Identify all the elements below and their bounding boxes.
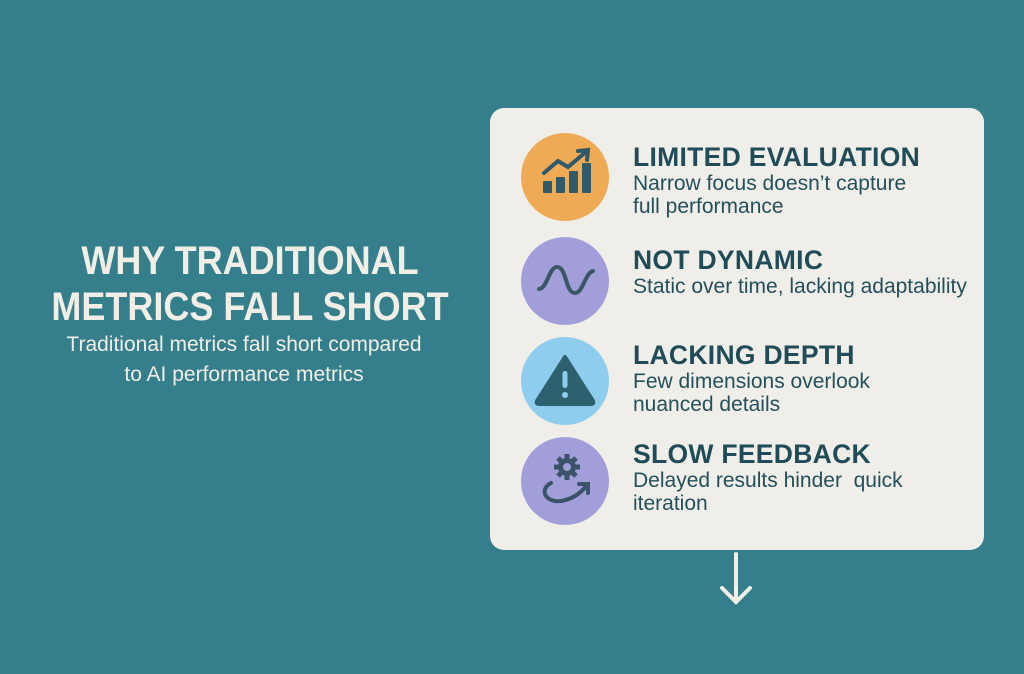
icon: wave [521,237,609,325]
subtitle: Traditional metrics fall short compared [66,333,422,356]
text: not dynamic: NOT DYNAMIC [633,245,823,275]
text: slow feedback: SLOW FEEDBACK [633,439,871,469]
icon: warning [521,337,609,425]
text: not dynamic [633,245,967,298]
text: slow feedback [633,439,903,515]
icon: gear cycle [521,437,609,525]
title: METRICS FALL SHORT [51,285,449,329]
panel: reasons card [490,108,984,550]
text: limited evaluation [633,142,920,218]
text: not dynamic: Static over time, lacking adaptability [633,275,967,298]
subtitle: to AI performance metrics [124,363,364,386]
arrow: down [720,552,752,605]
text: slow feedback: Delayed results hinder quick [633,469,903,492]
text: lacking depth: LACKING DEPTH [633,340,855,370]
icon: growth chart [521,133,609,221]
title [51,239,449,329]
text: lacking depth: Few dimensions overlook [633,370,870,393]
text: lacking depth [633,340,870,416]
subtitle [66,333,422,386]
text: lacking depth: nuanced details [633,393,780,416]
text: limited evaluation: Narrow focus doesn’t capture [633,172,906,195]
title: WHY TRADITIONAL [81,239,419,283]
text: limited evaluation: LIMITED EVALUATION [633,142,920,172]
text: limited evaluation: full performance [633,195,784,218]
text: slow feedback: iteration [633,492,708,515]
